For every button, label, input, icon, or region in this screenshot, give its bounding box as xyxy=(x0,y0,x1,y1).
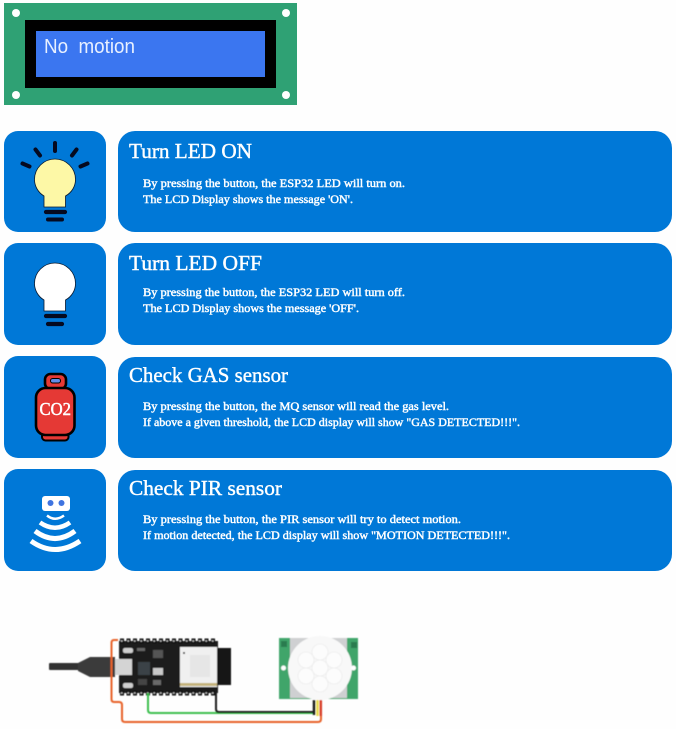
ESP32 board xyxy=(115,641,231,693)
panel: Turn LED OFF: By pressing the button, the ESP32 LED will turn off. xyxy=(143,285,405,299)
panel: Turn LED ON: By pressing the button, the ESP32 LED will turn on. xyxy=(143,176,405,190)
panel: Turn LED ON: The LCD Display shows the message 'ON'. xyxy=(143,192,353,206)
icon tile: LED on xyxy=(4,131,106,232)
icon tile: LED off xyxy=(4,243,106,345)
LCD display xyxy=(4,3,297,105)
CO2 label: CO2 xyxy=(40,399,71,419)
PIR sensor xyxy=(279,636,358,700)
panel: Turn LED ON: Turn LED ON xyxy=(129,139,252,163)
panel: Check GAS sensor: If above a given threshold, the LCD display will show "GAS DETECTED!!!". xyxy=(143,415,520,429)
panel: Turn LED OFF: Turn LED OFF xyxy=(129,251,262,275)
panel: Turn LED OFF xyxy=(118,243,672,345)
panel: Check GAS sensor xyxy=(118,357,672,458)
panel: Turn LED ON xyxy=(118,131,672,232)
USB cable xyxy=(49,657,115,677)
wires xyxy=(112,640,321,722)
LCD message: No motion xyxy=(44,36,135,58)
panel: Check GAS sensor: Check GAS sensor xyxy=(129,363,288,387)
panel: Check PIR sensor: By pressing the button, the PIR sensor will try to detect motion. xyxy=(143,512,461,526)
panel: Check GAS sensor: By pressing the button, the MQ sensor will read the gas level. xyxy=(143,399,449,413)
panel: Turn LED OFF: The LCD Display shows the message 'OFF'. xyxy=(143,301,359,315)
icon tile: CO2 gas cylinder xyxy=(4,356,106,458)
panel: Check PIR sensor: If motion detected, the LCD display will show "MOTION DETECTED!!!". xyxy=(143,528,510,542)
wiring diagram xyxy=(49,636,358,722)
panel: Check PIR sensor xyxy=(118,470,672,571)
icon tile: PIR motion sensor xyxy=(4,469,106,571)
panel: Check PIR sensor: Check PIR sensor xyxy=(129,476,282,500)
